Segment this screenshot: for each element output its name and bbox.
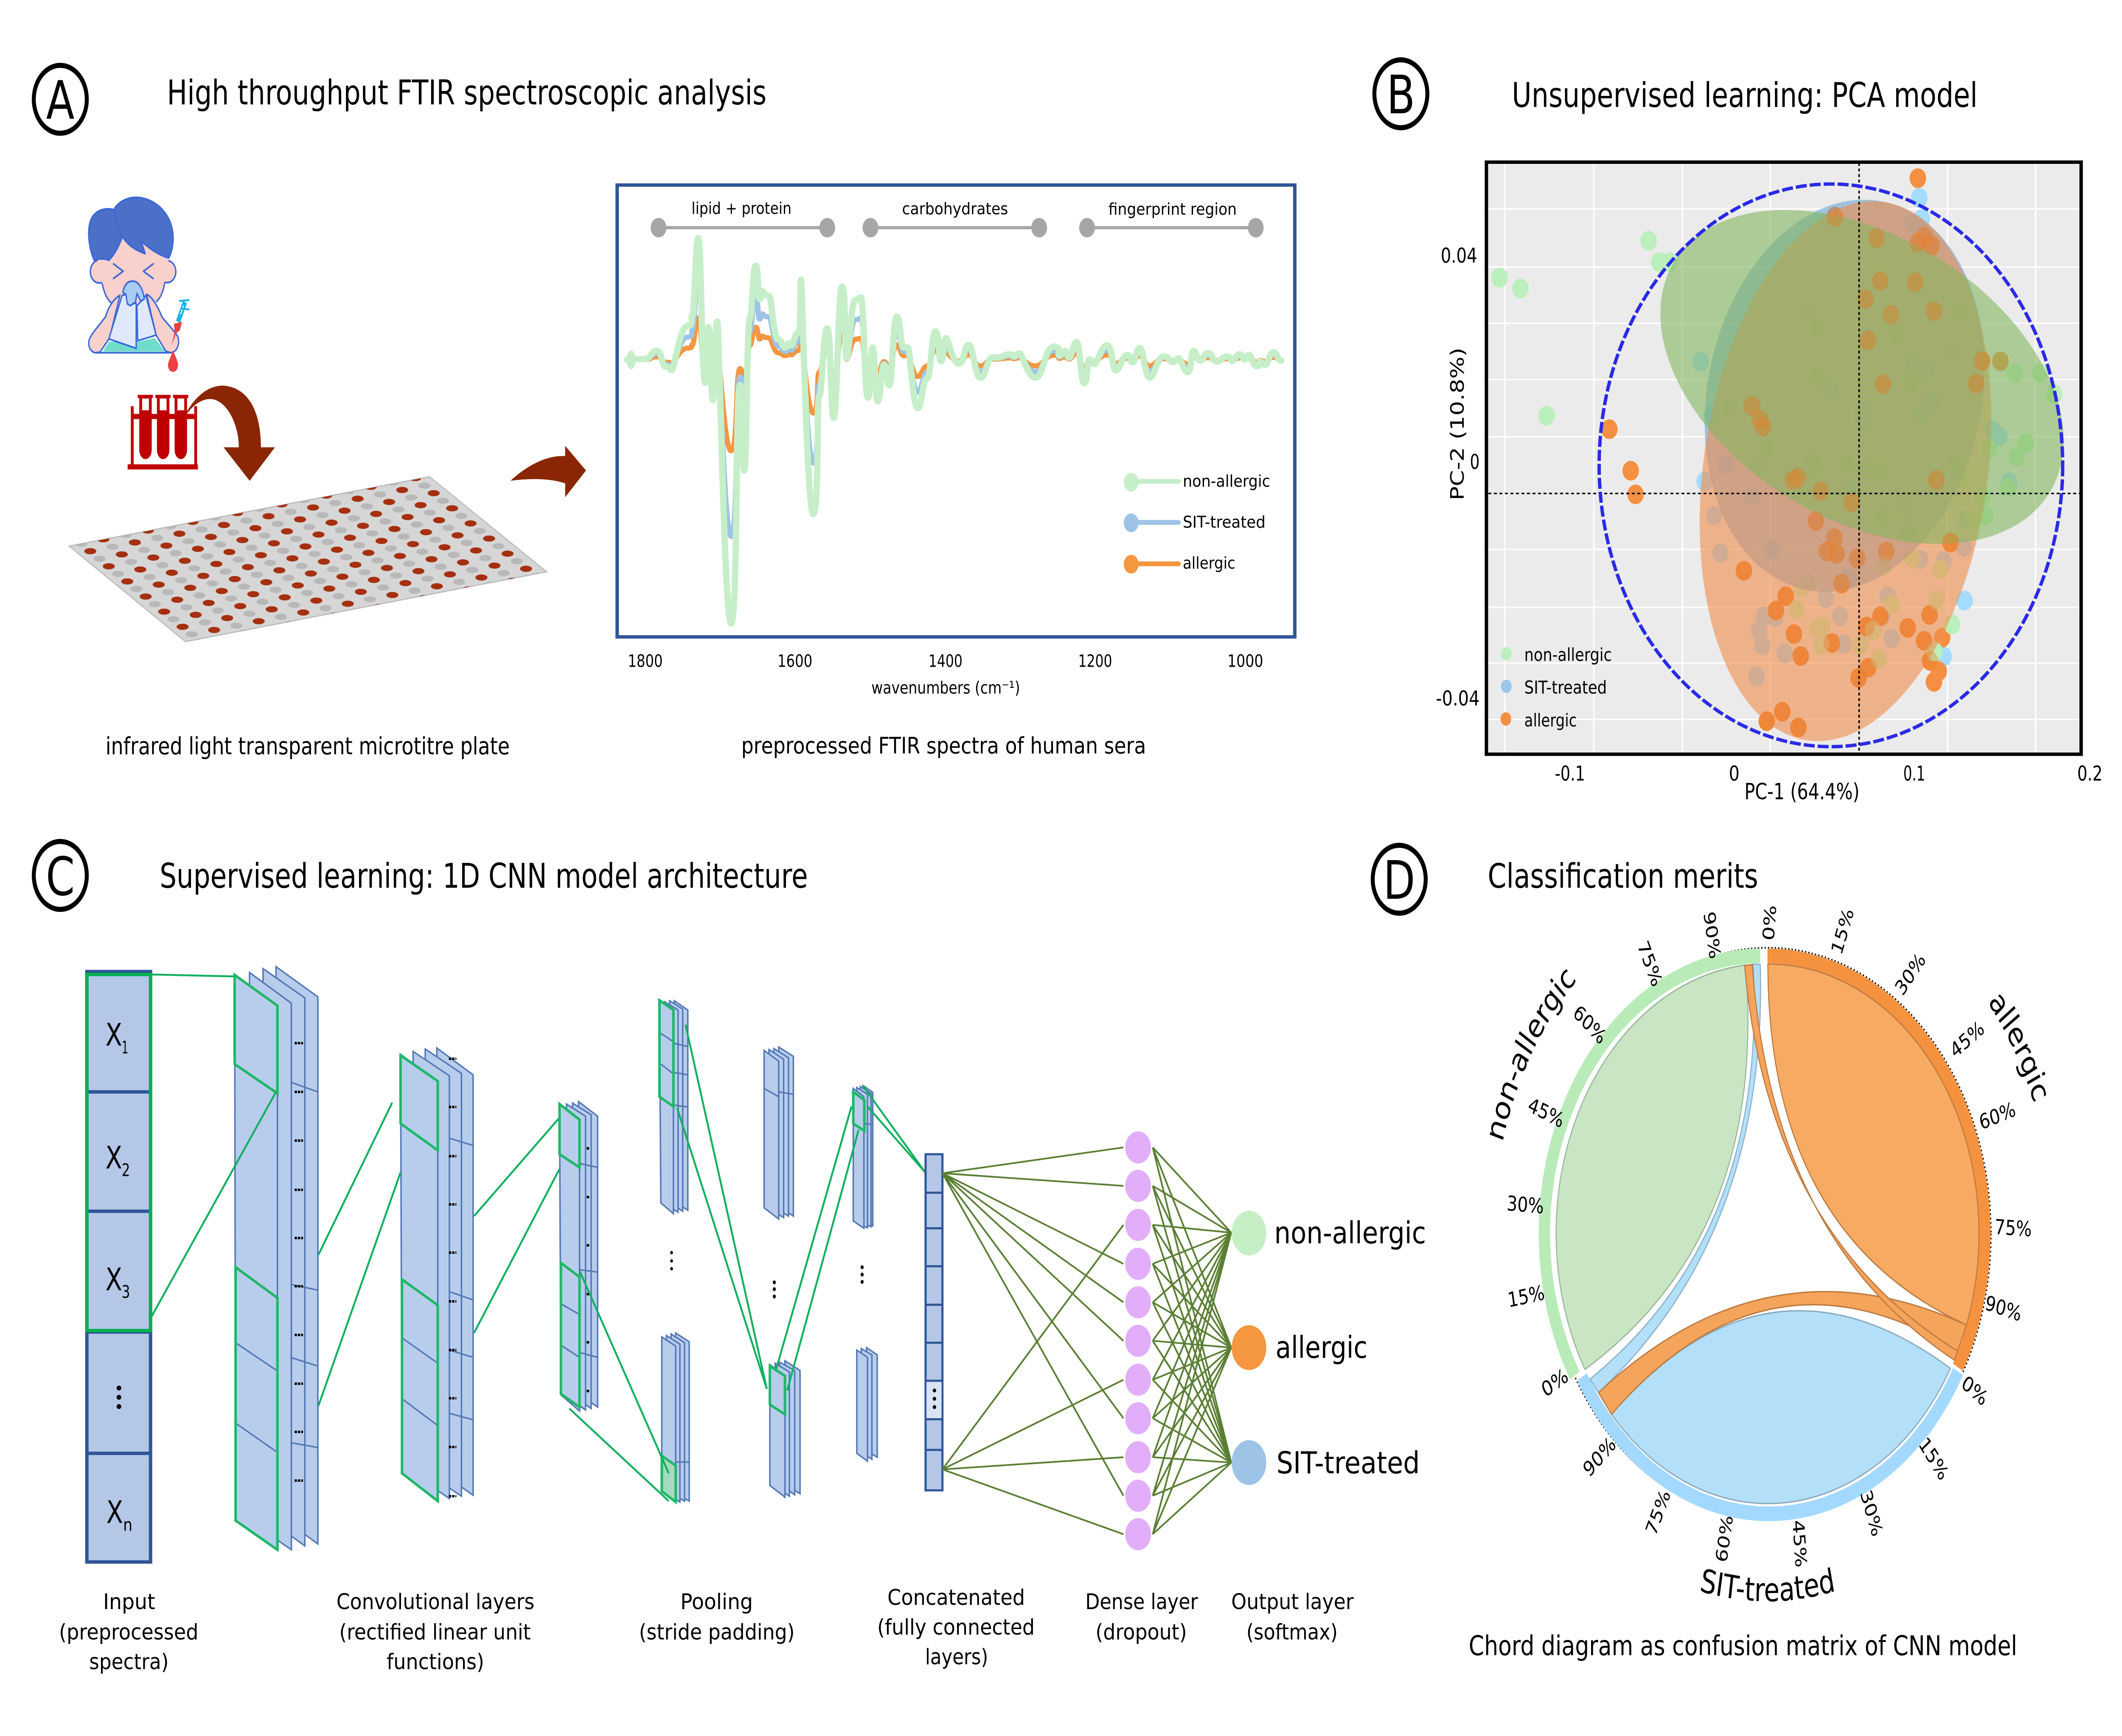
tick labels: allergic: 90% [1983,1291,2024,1327]
scatter points: non-allergic [1491,231,2062,668]
convolutional layer 2 [401,1048,473,1501]
tick labels: non-allergic: 0% [1538,1364,1572,1402]
input column: X [105,1016,122,1053]
x axis labels: 1600 [778,651,812,671]
tick labels: allergic: 60% [1977,1098,2018,1135]
outer sector: SIT-treated [1582,1371,1958,1514]
layer captions: (fully connected [877,1615,1035,1640]
confidence ellipse: non-allergic [1591,141,2122,612]
layer captions [59,1589,795,1674]
legend [1124,472,1270,574]
concatenated column [926,1154,943,1490]
allergic point tint showing through the ellipses [1736,207,1990,737]
ellipsis [773,1280,776,1298]
legend: non-allergic [1524,645,1612,665]
outer sector: non-allergic [1544,956,1760,1375]
layer captions: Pooling [680,1589,753,1614]
tick labels: non-allergic: 30% [1506,1192,1544,1219]
region markers [651,199,1264,238]
legend: SIT-treated [1183,513,1266,532]
layer captions: Concatenated [887,1585,1025,1610]
panel label C [34,841,87,909]
pooling layer 2 bottom [770,1361,800,1497]
legend: non-allergic [1183,472,1270,491]
scatter points: SIT-treated [1693,188,2018,686]
panel label B: B [1387,65,1415,126]
title C: Supervised learning: 1D CNN model architecture [160,856,808,896]
tick labels: allergic [1760,904,2032,1327]
scatter points: allergic [1601,168,2009,737]
tick labels: non-allergic: 15% [1506,1281,1546,1313]
layer captions: spectra) [89,1649,168,1674]
layer captions: (softmax) [1246,1620,1338,1645]
caption: microtitre plate: infrared light transparent microtitre plate [106,732,510,760]
axis labels: -0.1 [1555,762,1585,785]
tick labels: SIT-treated: 90% [1580,1432,1620,1482]
panel A left: sampling and plate [69,386,586,760]
pooling layer 2 top [764,1047,793,1219]
output nodes and labels: non-allergic [1274,1216,1426,1251]
input column [87,972,151,1562]
legend: allergic [1183,554,1235,572]
region markers: fingerprint region [1109,200,1237,219]
pooling layer 1 top [660,1000,688,1214]
chord: SIT-treated to SIT-treated [1611,1311,1951,1503]
title A: High throughput FTIR spectroscopic analysis [167,73,766,112]
chord: SIT-treated to non-allergic [1590,964,1760,1393]
panel label D [1373,845,1426,913]
outer sector: allergic [1768,956,1985,1367]
panel label B [1374,60,1427,128]
layer captions: (stride padding) [639,1619,795,1645]
chord: non-allergic to non-allergic [1556,965,1748,1369]
sector name: SIT-treated: SIT-treated [1698,1562,1838,1610]
tick labels: allergic: 45% [1947,1016,1988,1063]
title D: Classification merits [1488,856,1758,896]
y axis title: PC-2 (10.8%) [1446,348,1468,500]
convolutional layer 3 [559,1102,598,1411]
panel A right: FTIR spectra chart [617,185,1295,759]
panel label A [34,65,87,133]
title B: Unsupervised learning: PCA model [1512,75,1978,115]
layer captions: (dropout) [1095,1620,1187,1645]
microtitre plate [69,477,547,642]
x axis labels: 1400 [929,651,963,671]
pooling layer 3 top [853,1085,873,1228]
pooling layer 3 bottom [857,1348,877,1461]
tick labels: SIT-treated: 0% [1958,1371,1991,1411]
tick labels: SIT-treated: 15% [1914,1433,1952,1485]
dense connections [943,1147,1231,1534]
input column: 3 [122,1282,130,1302]
legend: allergic [1524,710,1577,731]
tick labels: non-allergic: 60% [1569,1001,1610,1049]
caption: chord diagram: Chord diagram as confusion matrix of CNN model [1469,1631,2017,1662]
tick labels: non-allergic: 90% [1699,910,1724,961]
confidence ellipse: allergic [1668,186,2023,757]
output nodes and labels: SIT-treated [1277,1446,1420,1481]
chart frame [617,185,1295,637]
tick labels: allergic: 0% [1760,904,1780,942]
dashed crosshair [1488,163,2081,752]
plot frame [1486,162,2081,754]
output nodes and labels: allergic [1276,1330,1367,1366]
tick labels: SIT-treated: 45% [1788,1519,1810,1568]
axis labels: 0.04 [1441,244,1477,267]
caption: spectra: preprocessed FTIR spectra of human sera [741,732,1146,759]
ellipsis [670,1251,673,1270]
sector name: non-allergic: non-allergic [1480,959,1582,1145]
panel C right: pooling, concatenation, dense, output [764,1047,1426,1669]
dashed overall ellipse [1599,184,2063,747]
x axis labels: wavenumbers (cm⁻¹) [871,678,1020,698]
tick labels: allergic: 15% [1828,905,1858,958]
layer captions: Output layer [1231,1590,1354,1615]
tick labels: non-allergic: 45% [1525,1093,1566,1133]
input column: X [105,1139,122,1176]
connecting lines between conv and pooling [151,974,767,1501]
sector name: allergic: allergic [1983,984,2056,1107]
pooling layer 1 bottom [662,1333,689,1502]
layer captions: (rectified linear unit [339,1619,531,1645]
panel C left: input, convolution, pooling [59,967,795,1674]
axis labels: PC-1 (64.4%) [1744,779,1860,805]
input column: X [105,1261,122,1298]
tick labels: SIT-treated [1580,1371,1991,1568]
tick labels: allergic: 30% [1892,948,1930,1000]
input column: X [107,1494,123,1530]
layer captions: functions) [387,1649,484,1674]
layer captions: layers) [925,1645,988,1669]
region markers: carbohydrates [902,199,1008,218]
panel D: chord diagram [1469,856,2056,1662]
axis labels: 0.2 [2077,762,2102,785]
output nodes and labels [1232,1211,1426,1485]
axis labels: 0.1 [1903,762,1925,785]
spectra lines [626,238,1281,623]
x axis labels: 1200 [1078,651,1112,671]
layer captions: Dense layer [1085,1590,1198,1615]
arrow: tubes to plate [181,386,275,481]
x axis labels [628,651,1263,698]
icon: sneezing patient [89,197,189,372]
axis labels: -0.04 [1436,687,1479,710]
panel label D: D [1383,850,1415,911]
axis labels [1436,244,2102,805]
x axis labels: 1800 [628,651,663,671]
convolutional layer 1 [235,967,318,1550]
ellipsis [861,1265,864,1284]
tick labels: non-allergic [1506,910,1724,1402]
layer captions: Convolutional layers [337,1589,534,1614]
plot background [1486,162,2081,754]
tick labels: non-allergic: 75% [1634,937,1666,990]
tick labels: allergic: 75% [1994,1215,2032,1242]
region markers: lipid + protein [691,199,792,218]
outer dotted ring [1545,948,1991,1519]
x axis labels: 1000 [1227,651,1263,671]
tick labels: SIT-treated: 60% [1712,1513,1737,1564]
layer captions [877,1585,1354,1669]
chord: allergic to SIT-treated [1598,1292,1967,1414]
chord: allergic to allergic [1768,964,1979,1325]
axis labels: 0 [1729,762,1740,785]
arrow: plate to spectra [511,446,586,497]
panel label A: A [46,70,74,132]
dense layer nodes [1125,1131,1151,1550]
tick labels: SIT-treated: 30% [1856,1487,1886,1540]
tick labels: SIT-treated: 75% [1642,1486,1675,1539]
layer captions: Input [103,1589,155,1614]
chord: allergic to non-allergic [1745,965,1958,1360]
icon: blood test tubes [128,395,198,469]
axis labels: 0 [1470,450,1479,474]
legend [1501,645,1612,731]
input column: 2 [122,1160,130,1181]
panel label C: C [46,846,75,908]
input column: 1 [122,1038,128,1058]
input column: n [123,1515,132,1535]
connecting green lines [776,1086,925,1391]
layer captions: (preprocessed [59,1619,199,1645]
legend: SIT-treated [1524,677,1607,698]
confidence ellipse: SIT-treated [1676,181,2014,610]
panel B: PCA scatter [1436,141,2122,805]
